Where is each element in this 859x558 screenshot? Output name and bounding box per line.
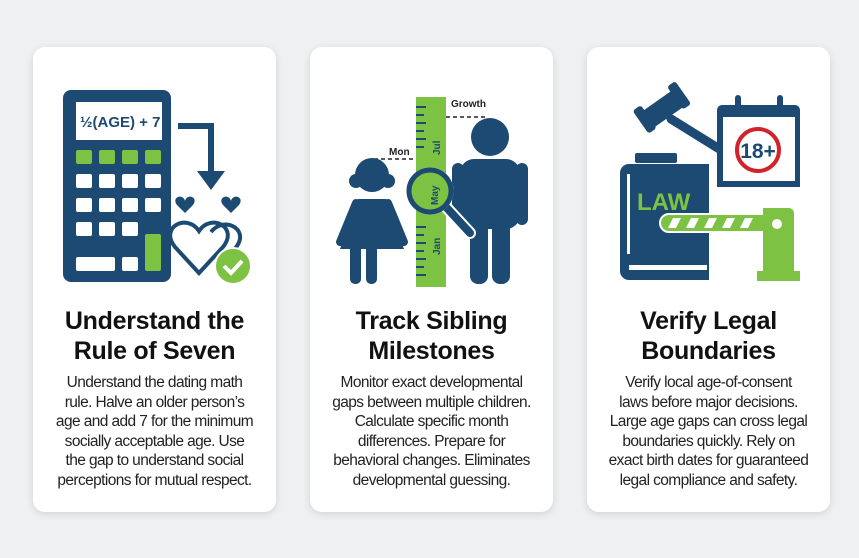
text block: boundaries quickly. Rely on <box>622 432 795 450</box>
icon: ruler with children: May <box>430 185 441 205</box>
text block: age and add 7 for the minimum <box>56 413 253 430</box>
heading: Verify Legal <box>640 307 777 335</box>
text block: the gap to understand social <box>66 452 243 469</box>
text block: Understand the dating math <box>67 374 242 391</box>
icon: calculator with hearts <box>63 90 250 283</box>
text block: perceptions for mutual respect. <box>57 472 252 488</box>
icon: ruler with children: Jul <box>432 140 443 155</box>
text block: socially acceptable age. Use <box>65 432 244 450</box>
heading <box>65 307 244 365</box>
text block <box>609 374 808 488</box>
heading <box>356 307 507 365</box>
text block: laws before major decisions. <box>619 394 798 410</box>
text block: developmental guessing. <box>353 472 510 488</box>
heading: Track Sibling <box>356 307 507 335</box>
icon: calculator with hearts: ½(AGE) + 7 <box>80 114 160 131</box>
icon: law book gavel calendar barrier: LAW <box>637 189 691 216</box>
panel: sibling milestones <box>310 47 553 512</box>
panel: legal boundaries <box>587 47 830 512</box>
heading: Understand the <box>65 307 244 335</box>
panel: rule of seven <box>33 47 276 512</box>
text block: rule. Halve an older person’s <box>65 394 244 410</box>
text block: Verify local age-of-consent <box>625 374 792 391</box>
icon: law book gavel calendar barrier: 18+ <box>740 140 776 163</box>
icon: ruler with children: Growth <box>451 99 486 110</box>
text block: Calculate specific month <box>355 413 508 430</box>
icon: law book gavel calendar barrier <box>620 82 800 281</box>
heading: Rule of Seven <box>74 337 235 365</box>
text block: Large age gaps can cross legal <box>610 413 807 430</box>
text block: Monitor exact developmental <box>341 374 522 391</box>
icon: ruler with children: Mon <box>389 147 410 158</box>
text block: behavioral changes. Eliminates <box>333 452 530 469</box>
text block: differences. Prepare for <box>358 432 505 450</box>
heading <box>640 307 777 365</box>
heading: Milestones <box>368 337 495 365</box>
icon: ruler with children: Jan <box>432 238 443 255</box>
text block <box>332 374 531 488</box>
icon: ruler with children <box>336 97 528 287</box>
heading: Boundaries <box>641 337 776 365</box>
text block: gaps between multiple children. <box>332 394 531 410</box>
text block: exact birth dates for guaranteed <box>609 452 808 469</box>
text block: legal compliance and safety. <box>620 472 797 488</box>
text block <box>56 374 253 488</box>
